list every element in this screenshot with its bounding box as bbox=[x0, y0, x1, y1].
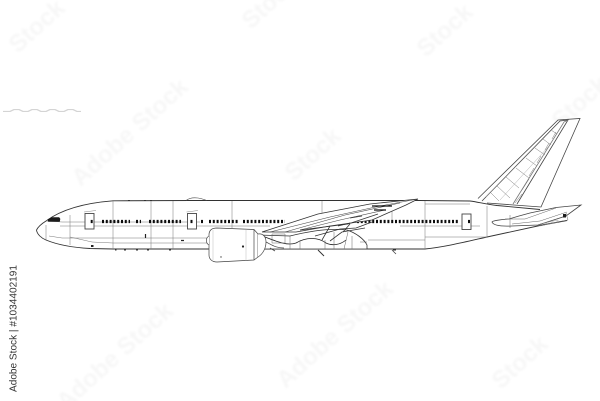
watermarks: Adobe Stock bbox=[271, 275, 399, 394]
wing body fairing bbox=[258, 229, 396, 256]
vertical tail bbox=[478, 118, 580, 207]
watermarks: Adobe Stock bbox=[66, 73, 194, 192]
watermarks: Stock bbox=[412, 0, 479, 62]
engine bbox=[206, 228, 284, 262]
fuselage panel lines bbox=[46, 201, 487, 249]
small details bbox=[146, 234, 184, 240]
cockpit windows bbox=[48, 218, 60, 222]
wing bbox=[262, 199, 418, 241]
fuselage bbox=[36, 200, 567, 250]
faint dashed mark at left bbox=[3, 110, 81, 112]
satcom fairing bbox=[186, 198, 207, 200]
horizontal stabilizer bbox=[492, 205, 581, 228]
stock id text: Adobe Stock | #1034402191 bbox=[8, 265, 20, 392]
passenger window rows bbox=[91, 220, 470, 223]
belly and top marks bbox=[115, 249, 396, 251]
watermarks: Stock bbox=[487, 330, 554, 394]
passenger doors bbox=[84, 210, 471, 230]
watermarks: Stock bbox=[280, 122, 347, 186]
aircraft drawing bbox=[36, 118, 581, 262]
